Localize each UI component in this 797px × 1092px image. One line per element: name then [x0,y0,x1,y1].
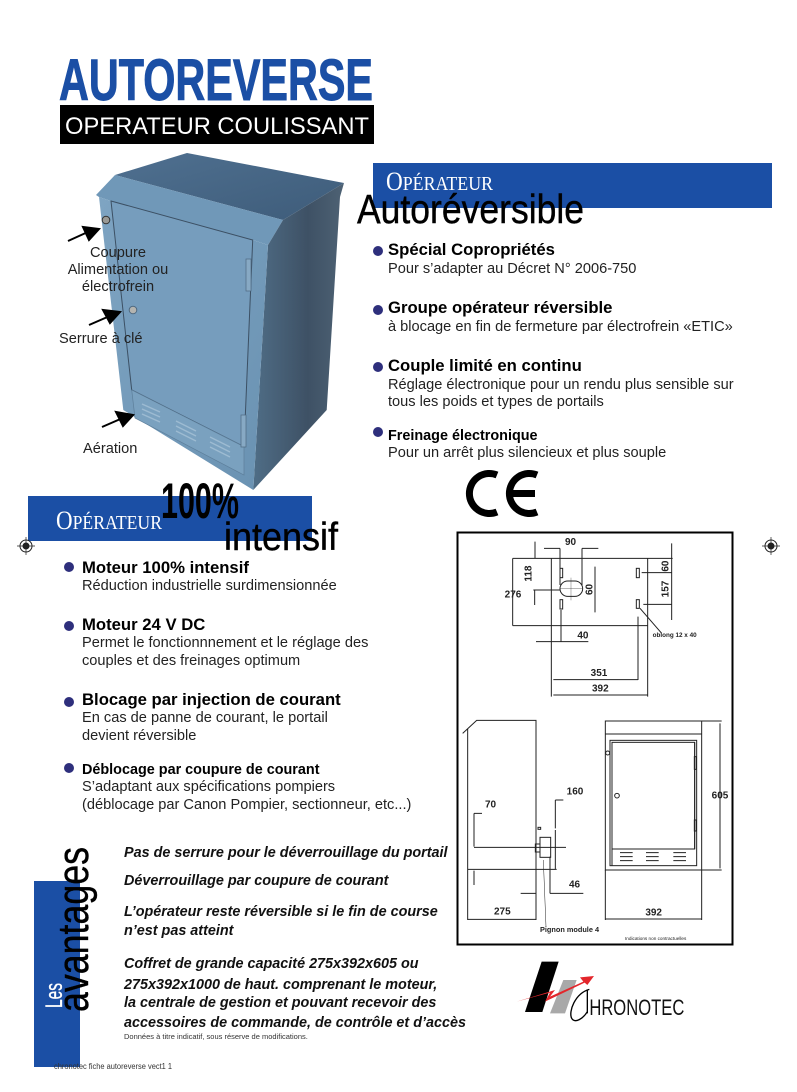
photo: cabinet [96,153,344,490]
list: intensif features: En cas de panne de courant, le portail [82,710,328,726]
list: avantages: Coffret de grande capacité 275x392x605 ou [124,956,419,972]
panel: les avantages sidebar: Les [41,983,68,1008]
list: avantages: L’opérateur reste réversible si le fin de course [124,904,438,920]
list: autoreversible features: à blocage en fin de fermeture par électrofrein «ETIC» [388,319,733,335]
label: aeration: Aération [83,441,137,457]
list: intensif features: Moteur 24 V DC [82,615,205,634]
panel: les avantages sidebar [34,847,98,1067]
drawing: mounting plan: 157 [661,580,672,597]
drawing: mounting plan: 60 [585,583,596,595]
drawing: mounting plan: 351 [591,668,608,679]
list: intensif features: S’adaptant aux spécifications pompiers [82,779,335,795]
list: intensif features [64,558,411,813]
header: operateur 100% intensif: 100% [161,473,239,529]
list: avantages: n’est pas atteint [124,923,235,939]
icon: registration mark right [762,537,780,555]
label: coupure: Coupure [90,245,146,261]
list: autoreversible features: Pour un arrêt plus silencieux et plus souple [388,445,666,461]
logo: chronotec [517,962,684,1021]
list: autoreversible features: Couple limité en continu [388,356,582,375]
title: AUTOREVERSE [59,48,373,113]
drawing: mounting plan: 90 [565,537,577,548]
drawing: side and front views: 605 [712,791,729,802]
list: autoreversible features [373,240,734,461]
drawing: side and front views: 392 [645,908,662,919]
list: avantages: Pas de serrure pour le déverrouillage du portail [124,845,449,861]
drawing: side and front views: 160 [567,787,584,798]
drawing: side and front views: Pignon module 4 [540,925,600,934]
drawing: mounting plan: 276 [505,590,522,601]
drawing: side and front views: 70 [485,800,497,811]
icon: registration mark left [17,537,35,555]
list: avantages [123,845,466,1031]
panel: les avantages sidebar: avantages [49,847,98,1012]
logo: chronotec: HRONOTEC [589,995,684,1020]
drawing: side and front views: Indications non contractuelles [625,936,687,941]
list: autoreversible features: Réglage électronique pour un rendu plus sensible sur [388,377,734,393]
list: intensif features: Permet le fonctionnnement et le réglage des [82,635,368,651]
list: avantages: accessoires de commande, de contrôle et d’accès [124,1015,466,1031]
list: autoreversible features: Spécial Copropriétés [388,240,555,259]
label: coupure [68,245,168,295]
list: avantages: la centrale de gestion et pouvant recevoir des [124,995,436,1011]
list: autoreversible features: tous les poids et types de portails [388,394,604,410]
list: intensif features: devient réversible [82,728,196,744]
list: avantages: 275x392x1000 de haut. comprenant le moteur, [123,977,437,993]
drawing: side and front views [463,720,729,941]
footer: chronotec fiche autoreverse vect1 1 [54,1062,173,1071]
subtitle banner: OPERATEUR COULISSANT [65,113,369,140]
arrow: serrure [89,310,120,325]
header: operateur autoreversible: Autoréversible [357,186,584,232]
header: operateur autoreversible [357,163,772,232]
drawing: mounting plan: 60 [661,560,672,572]
list: intensif features: Déblocage par coupure de courant [82,762,320,778]
drawing: mounting plan [505,537,697,697]
arrow: aeration [102,412,133,427]
list: avantages: Déverrouillage par coupure de courant [124,873,390,889]
list: intensif features: Réduction industrielle surdimensionnée [82,578,337,594]
list: autoreversible features: Pour s’adapter au Décret N° 2006-750 [388,261,636,277]
header: operateur 100% intensif: intensif [224,516,338,559]
list: intensif features: couples et des freinages optimum [82,653,300,669]
drawing: mounting plan: 40 [577,630,589,641]
list: autoreversible features: Groupe opérateur réversible [388,298,612,317]
arrow: coupure [68,227,99,241]
drawing: mounting plan: 392 [592,684,609,695]
drawing: mounting plan: 118 [523,565,534,582]
label: serrure: Serrure à clé [59,331,143,347]
header: operateur autoreversible: OPÉRATEUR [386,167,494,196]
drawing: mounting plan: oblong 12 x 40 [653,632,697,639]
label: coupure: Alimentation ou [68,262,168,278]
panel: technical drawing [458,532,732,944]
label: coupure: électrofrein [82,279,154,295]
list: autoreversible features: Freinage électronique [388,428,538,444]
drawing: side and front views: 275 [494,906,511,917]
disclaimer: Données à titre indicatif, sous réserve de modifications. [124,1032,308,1041]
list: intensif features: Moteur 100% intensif [82,558,249,577]
drawing: side and front views: 46 [569,880,581,891]
header: operateur 100% intensif: OPÉRATEUR [56,506,163,535]
list: intensif features: (déblocage par Canon Pompier, sectionneur, etc...) [82,797,411,813]
subtitle banner [60,105,374,144]
list: intensif features: Blocage par injection de courant [82,690,341,709]
icon: CE mark [469,474,537,514]
header: operateur 100% intensif [28,473,338,559]
